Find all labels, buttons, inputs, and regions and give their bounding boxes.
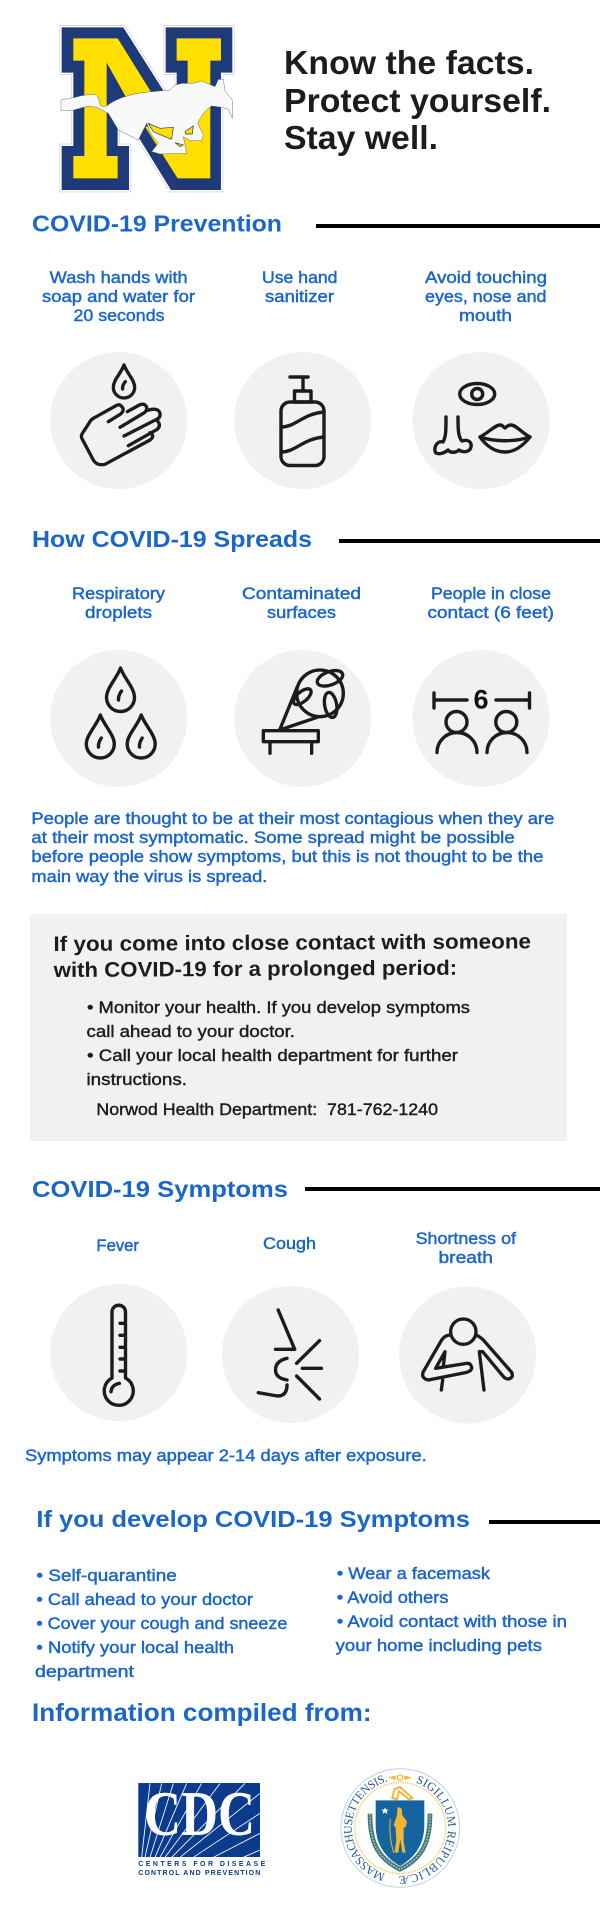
list: left column actions (35, 1567, 287, 1681)
panel: close contact advice (30, 914, 567, 1141)
label: hand sanitizer (262, 269, 338, 306)
icon: eye, nose and mouth (412, 352, 550, 489)
label: avoid touching (425, 269, 547, 325)
label: wash hands: soap and water for (42, 288, 196, 306)
text block: contagion note: at their most symptomatic. Some spread might be possible (31, 829, 515, 847)
label: cough: Cough (263, 1235, 316, 1253)
icon: washing hands (50, 352, 187, 489)
heading: COVID-19 Prevention (32, 210, 600, 236)
text block: contagion note (31, 810, 554, 886)
list: left column actions: department (35, 1663, 134, 1681)
list: left column actions: • Notify your local health (36, 1639, 234, 1657)
text block: contagion note: People are thought to be at their most contagious when they are (31, 810, 554, 828)
text block: contagion note: main way the virus is spread. (31, 868, 267, 886)
logo: CDC: CONTROL AND PREVENTION (138, 1870, 260, 1877)
icon: contaminated surface (234, 650, 371, 787)
title (284, 44, 551, 156)
label: respiratory droplets: Respiratory (72, 585, 166, 603)
label: wash hands: Wash hands with (50, 269, 188, 287)
text block: symptom onset: Symptoms may appear 2-14 days after exposure. (25, 1447, 427, 1465)
list: right column actions: • Avoid others (337, 1589, 448, 1607)
label: avoid touching: eyes, nose and (425, 288, 546, 306)
logo: Massachusetts state seal: MASSACHUSETTENSIS. (344, 1775, 388, 1882)
logo: Massachusetts state seal: SIGILLUM REIPUBLICÆ (399, 1776, 456, 1884)
label: contaminated surfaces: Contaminated (242, 585, 361, 603)
heading: information compiled from: Information compiled from: (32, 1699, 372, 1727)
label: close contact: People in close (431, 585, 551, 603)
icon: thermometer (50, 1284, 187, 1421)
heading: COVID-19 Prevention: COVID-19 Prevention (32, 210, 282, 236)
panel bullet list: instructions. (86, 1071, 187, 1089)
logo: Norwood N with mustang (61, 27, 232, 190)
label: avoid touching: Avoid touching (425, 269, 547, 287)
panel heading: with COVID-19 for a prolonged period: (53, 957, 457, 982)
label: fever: Fever (96, 1237, 139, 1255)
label: contaminated surfaces (242, 585, 361, 622)
title: Know the facts. (284, 44, 534, 81)
list: right column actions: your home including pets (336, 1637, 542, 1655)
label: hand sanitizer: Use hand (262, 269, 338, 287)
list: right column actions: • Avoid contact with those in (337, 1613, 567, 1631)
label: wash hands (42, 269, 196, 325)
label: respiratory droplets: droplets (85, 604, 152, 622)
list: left column actions: • Self-quarantine (36, 1567, 177, 1585)
label: wash hands: 20 seconds (74, 307, 164, 325)
label: respiratory droplets (72, 585, 166, 622)
list: left column actions: • Cover your cough and sneeze (36, 1615, 287, 1633)
icon: six feet distance: 6 (473, 684, 489, 714)
heading: If you develop symptoms: If you develop COVID-19 Symptoms (36, 1506, 470, 1532)
panel bullet list: call ahead to your doctor. (86, 1023, 295, 1041)
label: close contact (428, 585, 554, 622)
label: shortness of breath: breath (438, 1249, 493, 1267)
list: right column actions (336, 1565, 567, 1655)
icon: cough (222, 1286, 359, 1423)
panel bullet list: • Monitor your health. If you develop symptoms (87, 999, 470, 1017)
panel bullet list: • Call your local health department for further (87, 1047, 459, 1065)
heading: COVID-19 Symptoms: COVID-19 Symptoms (32, 1176, 288, 1202)
logo: Massachusetts state seal (340, 1768, 460, 1888)
icon: respiratory droplets (50, 650, 187, 787)
heading: COVID-19 Symptoms (32, 1176, 600, 1202)
heading: How COVID-19 Spreads (32, 526, 600, 552)
list: left column actions: • Call ahead to your doctor (36, 1591, 254, 1609)
list: right column actions: • Wear a facemask (337, 1565, 491, 1583)
title: Stay well. (284, 119, 438, 156)
logo: CDC (138, 1778, 266, 1877)
heading: How COVID-19 Spreads: How COVID-19 Spreads (32, 526, 312, 552)
logo: CDC: CENTERS FOR DISEASE (138, 1861, 266, 1868)
heading: If you develop symptoms (36, 1506, 600, 1532)
panel heading (52, 930, 531, 982)
panel bullet list (86, 999, 470, 1089)
text block: contagion note: before people show symptoms, but this is not thought to be the (31, 848, 543, 866)
label: hand sanitizer: sanitizer (265, 288, 335, 306)
icon: shortness of breath (399, 1286, 536, 1424)
label: avoid touching: mouth (459, 307, 512, 325)
label: contaminated surfaces: surfaces (267, 604, 336, 622)
icon: six feet distance (412, 650, 550, 787)
label: close contact: contact (6 feet) (428, 604, 554, 622)
label: shortness of breath: Shortness of (416, 1230, 516, 1248)
title: Protect yourself. (284, 82, 551, 119)
label: shortness of breath (416, 1230, 516, 1267)
icon: sanitizer bottle (234, 352, 371, 489)
panel heading: If you come into close contact with someone (53, 930, 531, 956)
logo: CDC: CDC (144, 1778, 255, 1849)
panel phone number: Norwod Health Department: 781-762-1240 (96, 1101, 438, 1119)
